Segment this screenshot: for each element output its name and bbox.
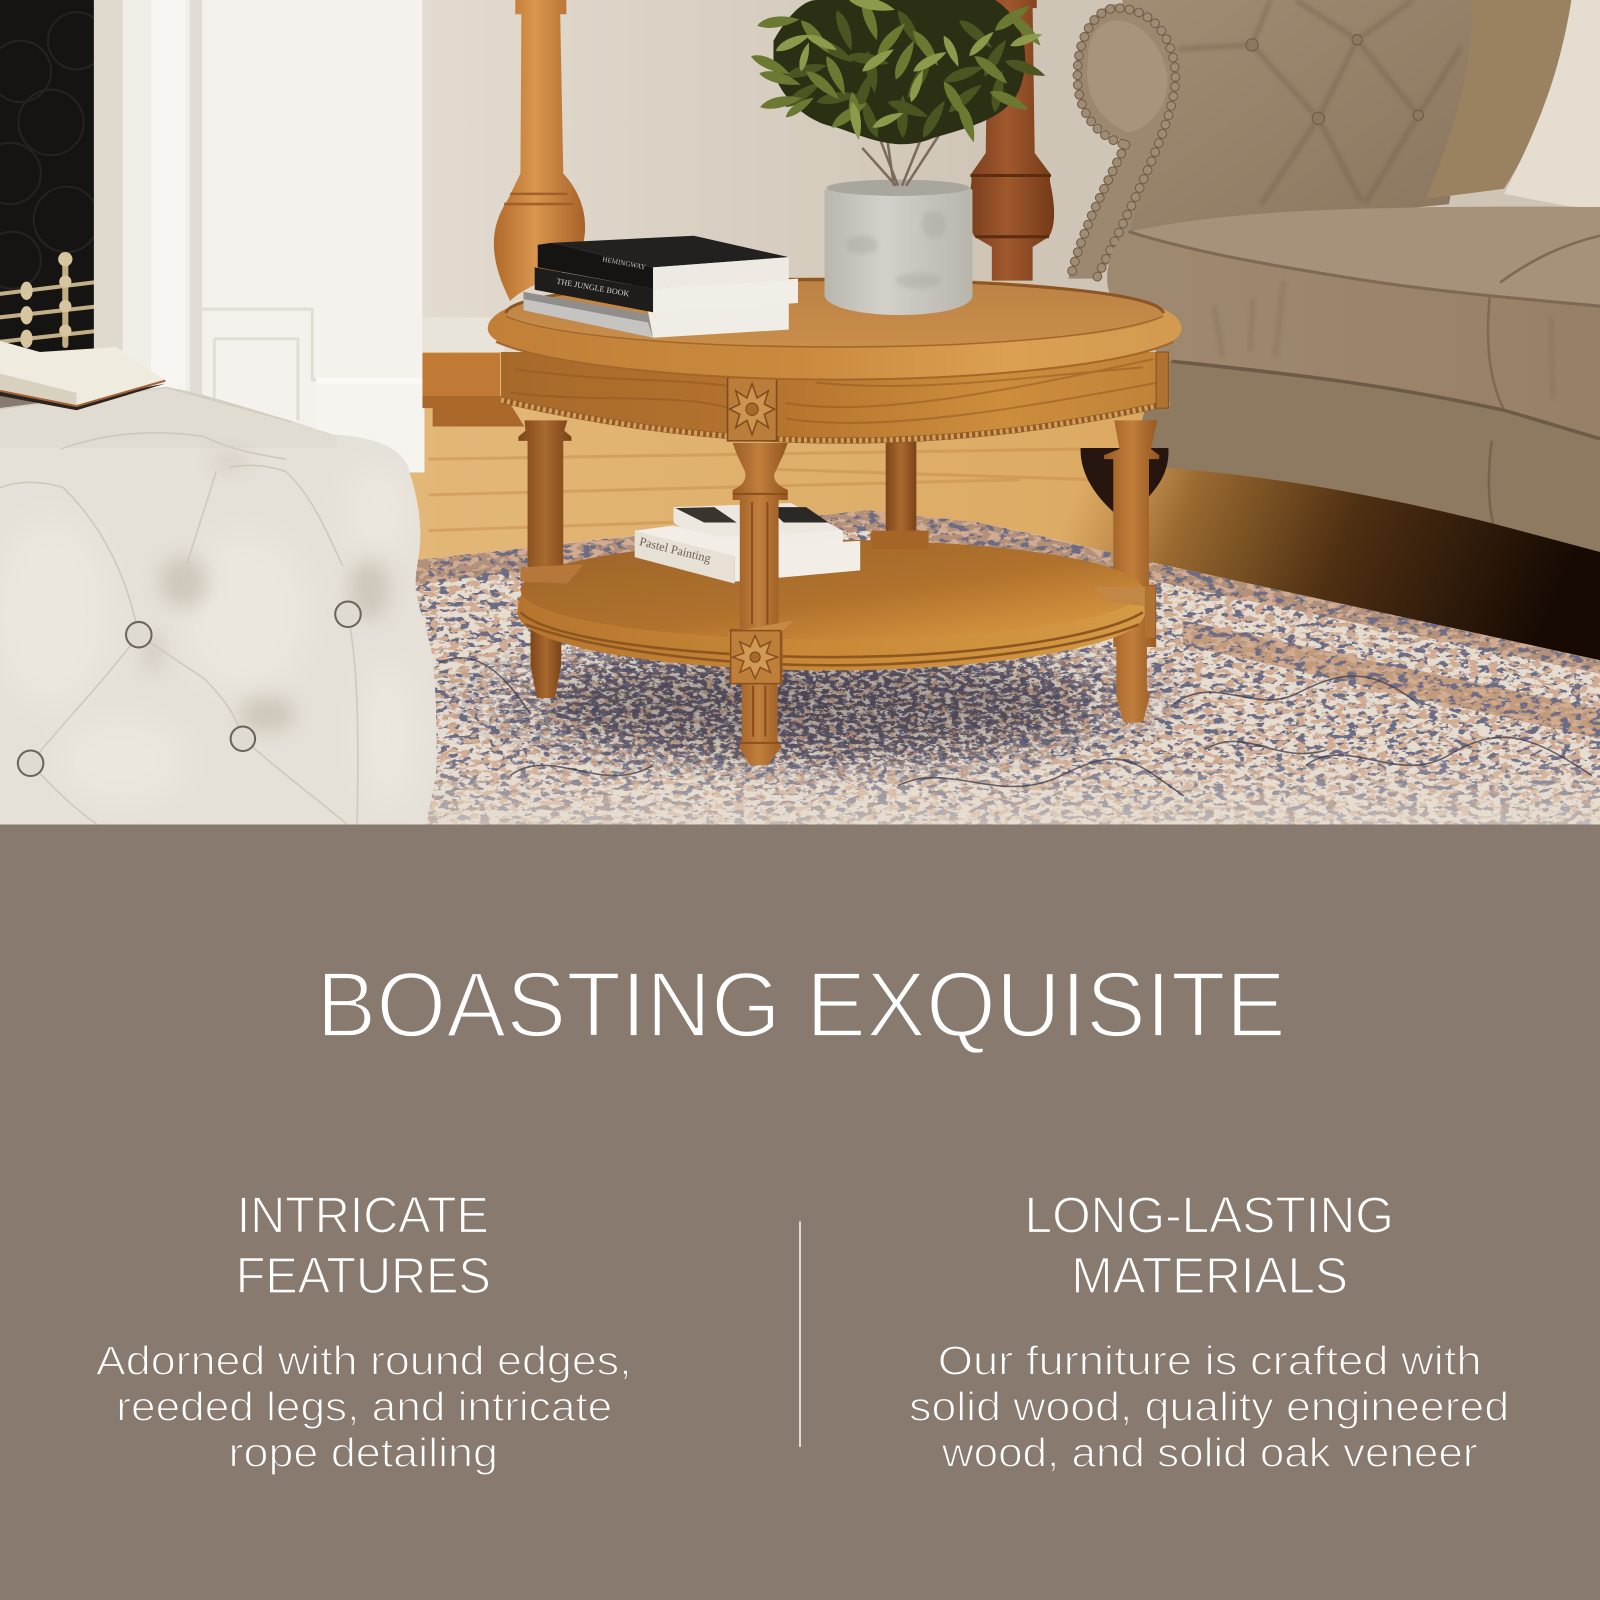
- buttons: [18, 602, 361, 776]
- left column body text: reeded legs, and intricate: [116, 1383, 612, 1429]
- seat cushions: [1107, 207, 1600, 439]
- left post of sideboard: [494, 0, 585, 301]
- right column body text: [909, 1337, 1509, 1475]
- right column heading: LONG-LASTING: [1024, 1187, 1394, 1244]
- table top surface: [506, 280, 1163, 347]
- main heading: BOASTING EXQUISITE: [316, 953, 1286, 1057]
- fireplace dark tile surround: [0, 0, 94, 352]
- table top rim: [488, 278, 1182, 380]
- books on lower shelf: [635, 503, 860, 584]
- soft shadows near buttons: [145, 455, 390, 733]
- right column heading: [1024, 1187, 1394, 1304]
- coffee table: [488, 278, 1182, 765]
- left column body text: [96, 1337, 632, 1475]
- brown text panel: [0, 824, 1600, 1600]
- concrete planter: [824, 179, 972, 315]
- right leg: [1104, 420, 1159, 722]
- left column: intricate features: [96, 1187, 632, 1475]
- middle book: [535, 267, 798, 312]
- left column heading: INTRICATE: [237, 1187, 489, 1244]
- right column body text: Our furniture is crafted with: [938, 1337, 1482, 1383]
- front leg: [731, 443, 788, 765]
- dark sofa foot: [1080, 448, 1168, 512]
- plinth of sideboard: [422, 353, 524, 427]
- upper rosette block: [728, 378, 777, 441]
- title on spine: THE JUNGLE BOOK: [556, 277, 630, 298]
- right post of sideboard: [969, 0, 1054, 281]
- table apron: [501, 352, 1169, 441]
- lower base: [1142, 360, 1600, 552]
- white column and wall panel: [94, 0, 437, 472]
- wooden floor: [410, 352, 1600, 660]
- baseboard: [422, 317, 504, 354]
- rug with floral pattern: [388, 500, 1600, 827]
- left column body text: Adorned with round edges,: [96, 1337, 632, 1383]
- open book on ottoman: [0, 341, 165, 410]
- right column body text: solid wood, quality engineered: [909, 1383, 1509, 1429]
- pillow taupe: [1426, 0, 1571, 199]
- lower book title: Pastel Painting: [638, 534, 712, 565]
- tufted cream ottoman: [0, 383, 439, 827]
- rolled arm: [1068, 4, 1122, 279]
- pillow white: [1504, 0, 1600, 212]
- soft highlights on puffs: [0, 464, 413, 806]
- lower shelf: [517, 531, 1155, 670]
- back leg: [870, 442, 916, 540]
- lower rosette block: [729, 620, 794, 684]
- right column body text: wood, and solid oak veneer: [941, 1429, 1478, 1475]
- left leg upper: [518, 420, 572, 582]
- tufting: [1179, 0, 1461, 204]
- left column heading: [236, 1187, 491, 1304]
- right column heading: MATERIALS: [1071, 1247, 1348, 1304]
- back wall: [422, 0, 1600, 357]
- sofa: [1068, 0, 1600, 552]
- photo: living room with round coffee table: [0, 0, 1600, 827]
- right leg block: [1145, 587, 1155, 638]
- left leg lower: [531, 622, 561, 698]
- stacked books on table: [523, 236, 798, 338]
- top book: [538, 236, 789, 289]
- sofa back: [1097, 0, 1474, 279]
- center divider line: [799, 1221, 801, 1447]
- top book: HEMINGWAY: [602, 255, 646, 272]
- nailhead trim on arm: [1070, 8, 1176, 278]
- brass fireplace fender: [0, 252, 100, 348]
- right apron block: [1156, 352, 1168, 408]
- rope detail: [501, 400, 1169, 441]
- left column heading: FEATURES: [236, 1247, 491, 1304]
- bottom book: [523, 292, 789, 338]
- left column body text: rope detailing: [229, 1429, 498, 1475]
- potted plant: [749, 0, 1047, 186]
- tuft seam lines: [0, 433, 358, 824]
- right column: long-lasting materials: [909, 1187, 1509, 1475]
